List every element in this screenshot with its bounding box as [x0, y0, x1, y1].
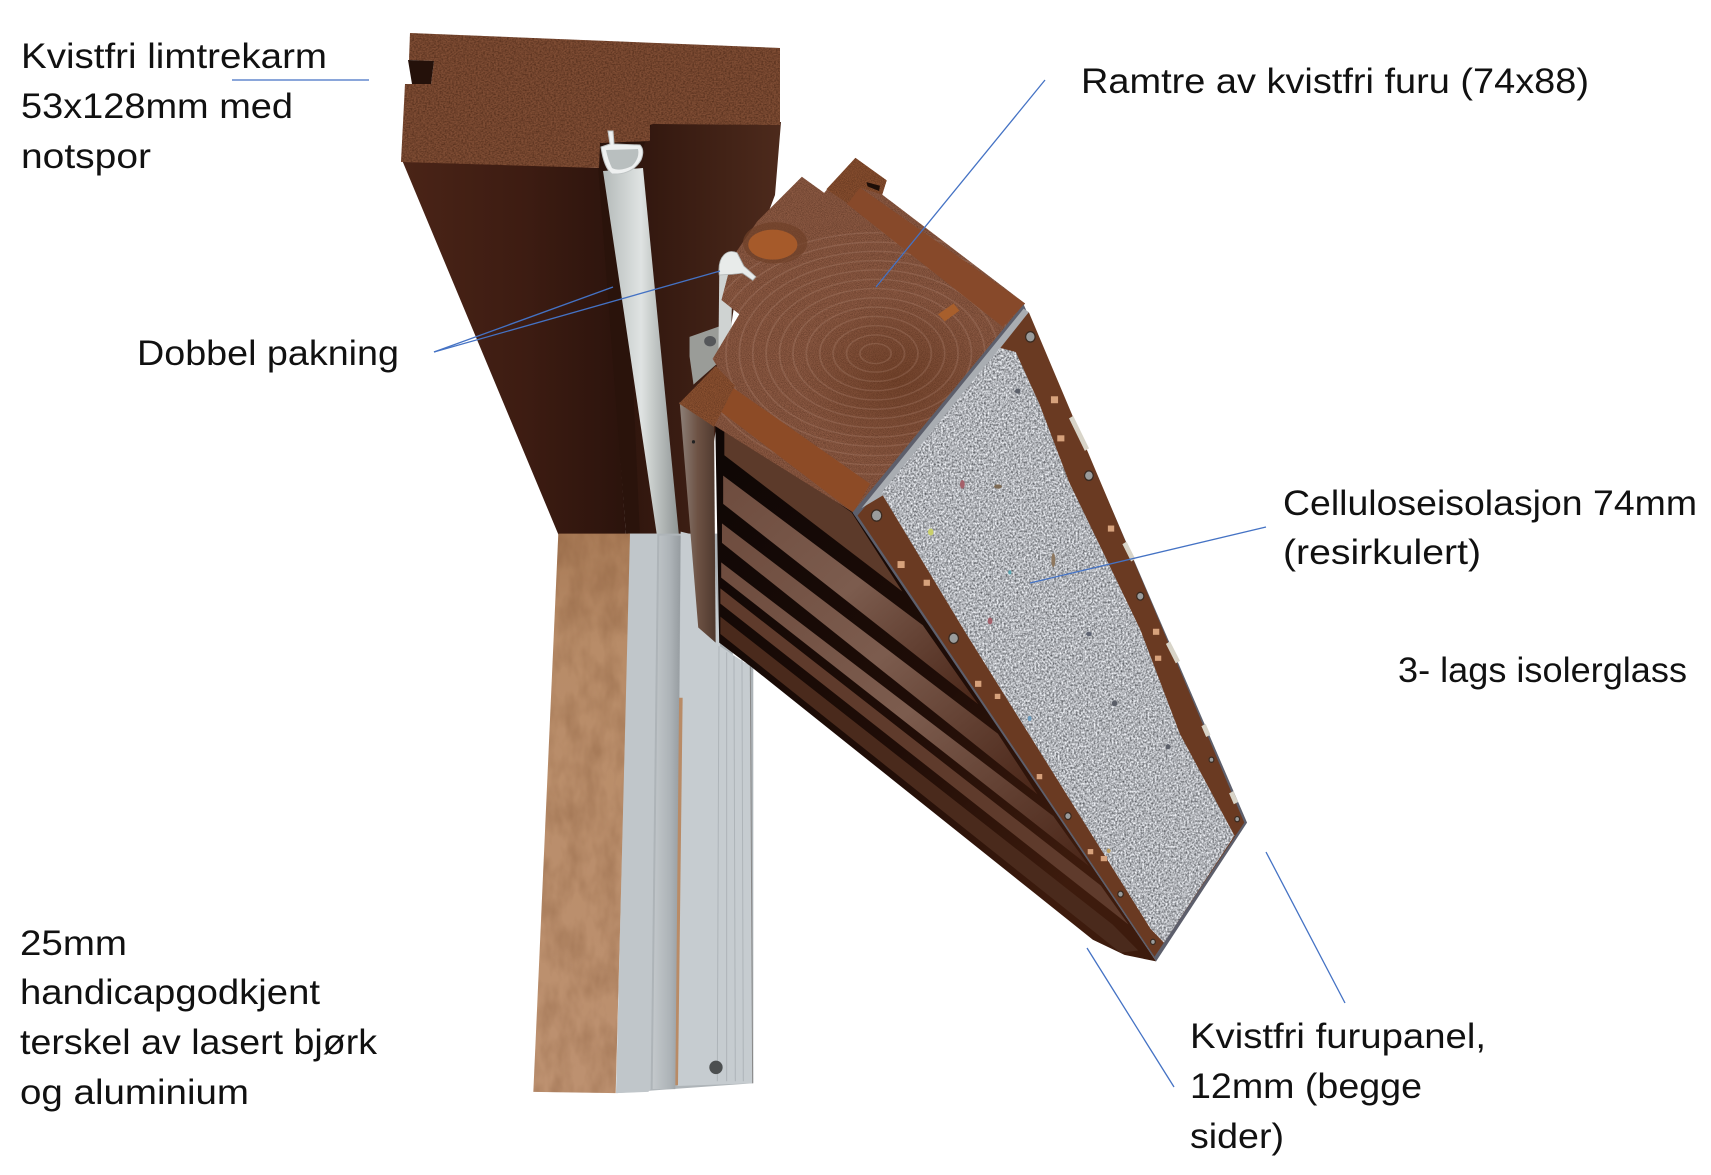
slat 2 [723, 476, 978, 704]
threshold: screw hole [709, 1061, 723, 1074]
label: frame: notspor [21, 137, 151, 176]
slat 4 [721, 562, 1089, 866]
label: threshold: 25mm [20, 924, 127, 963]
threshold: aluminium underlay [617, 534, 753, 1093]
door frame: cross-section end grain [401, 33, 780, 168]
slat 5 [720, 588, 1128, 925]
label: cellulose: Celluloseisolasjon 74mm [1283, 484, 1697, 523]
timber: small patch [938, 304, 959, 321]
fasteners [871, 332, 1240, 944]
threshold: aluminium plate [677, 532, 753, 1086]
glass outer edge [852, 304, 1247, 961]
leader: door gasket [434, 271, 720, 352]
door gasket profile [719, 251, 756, 280]
label: pine panel: 12mm (begge [1190, 1067, 1422, 1106]
label: frame [21, 37, 327, 176]
label: pine panel: Kvistfri furupanel, [1190, 1017, 1486, 1056]
label: pine frame: Ramtre av kvistfri furu (74x88) [1081, 62, 1589, 101]
perimeter strip [858, 312, 1244, 957]
threshold: aluminium strip [616, 534, 657, 1093]
label: pine panel: sider) [1190, 1117, 1284, 1156]
frame gasket [601, 131, 679, 536]
label: threshold [20, 924, 378, 1112]
timber: upper right strip [846, 187, 1025, 327]
door leaf: insulated section [852, 304, 1247, 961]
timber: top tongue [826, 158, 887, 204]
door leaf: slatted underside [680, 402, 1156, 961]
timber: lower left strip [715, 387, 870, 512]
underside base [715, 421, 1156, 961]
door frame: rebate shadow [596, 118, 690, 536]
slat 3 [722, 523, 1037, 794]
threshold of birch and aluminium [533, 532, 753, 1093]
leader: panel right [1266, 852, 1345, 1003]
timber: left tongue [679, 366, 735, 427]
label: frame: 53x128mm med [21, 87, 293, 126]
timber end grain [679, 158, 1025, 512]
threshold: plate grooves [717, 646, 753, 1083]
slat 6 [720, 617, 1138, 953]
wooden pegs [898, 396, 1161, 861]
door leaf: hinge plate [690, 326, 720, 385]
leader: panel left [1087, 948, 1174, 1087]
door frame: left dark face [402, 160, 626, 536]
door gasket strip [718, 271, 733, 361]
door leaf [679, 158, 1247, 961]
threshold: wood sliver [674, 698, 683, 1085]
gasket opening [606, 149, 638, 170]
threshold: birch surface [533, 534, 631, 1093]
label: cellulose [1283, 484, 1697, 572]
light edge fragments [1071, 417, 1236, 803]
label: glass: 3- lags isolerglass [1398, 651, 1687, 690]
label: threshold: handicapgodkjent [20, 973, 320, 1012]
timber: dark heart [800, 296, 996, 461]
label: pine panel [1190, 1017, 1486, 1156]
door leaf: frame timber end [679, 158, 1052, 512]
label: threshold: terskel av lasert bjørk [20, 1023, 378, 1062]
timber: knot [748, 230, 797, 260]
slat 1 [724, 424, 902, 591]
cellulose coloured fibres [928, 388, 1170, 853]
timber: groove [867, 182, 880, 191]
glass sheet over top edge [862, 309, 1029, 508]
gasket strip [603, 168, 679, 536]
leader: frame gasket [434, 287, 613, 352]
growth rings [713, 232, 1018, 475]
bracket hole [692, 440, 695, 444]
label: frame: Kvistfri limtrekarm [21, 37, 327, 76]
label: threshold: og aluminium [20, 1073, 249, 1112]
gasket profile [601, 131, 643, 174]
cellulose insulation [881, 348, 1234, 943]
leader lines [232, 80, 1345, 1087]
label: double gasket: Dobbel pakning [137, 334, 399, 373]
leader: cellulose [1030, 527, 1266, 583]
door frame: groove [408, 60, 434, 84]
aluminium bracket [680, 402, 716, 643]
leader: pine frame [876, 80, 1045, 287]
timber: knot surround [743, 222, 807, 264]
threshold: rounded ridge [653, 536, 681, 1089]
leader: frame [232, 79, 369, 81]
illustration: door frame [401, 33, 781, 536]
door frame: inner rebate face [625, 120, 781, 536]
label: cellulose: (resirkulert) [1283, 533, 1481, 572]
